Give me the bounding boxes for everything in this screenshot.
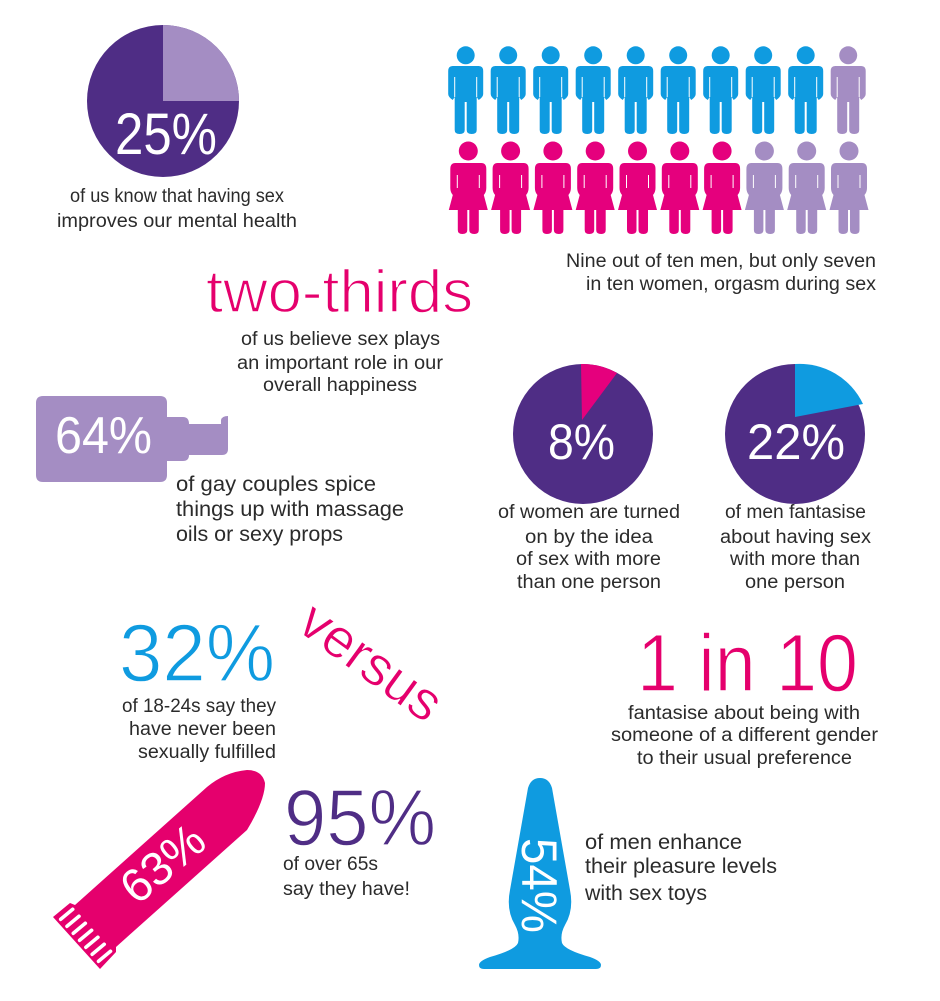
pie chart: 22% [725,364,865,504]
stat: 64%: 64% [55,407,152,465]
caption: orgasm: Nine out of ten men, but only seven [566,251,876,272]
stat: 54%: 54% [511,838,567,933]
caption: women [498,502,680,593]
caption: mental health: of us know that having sex [70,186,284,207]
row of men [448,46,866,134]
icon: vibrator [53,770,265,969]
caption: happiness [237,329,444,396]
heading: 1 in 10: 1 in 10 [637,618,858,709]
pie chart: 25%: 25% [115,102,217,167]
panel: 22% of men [720,364,872,593]
stat: 63%: 63% [109,813,215,914]
caption: happiness: an important role in our [237,353,444,374]
caption: women: of sex with more [516,549,661,570]
panel: men and women pictogram [448,46,877,295]
caption: sex toys [584,831,777,905]
heading: two-thirds: two-thirds [206,258,473,325]
caption: mental health [57,186,297,232]
caption: men [720,502,872,593]
caption: men: of men fantasise [725,502,866,523]
caption: 18-24s: sexually fulfilled [138,742,276,763]
panel: 63% toy [53,770,265,969]
caption: over 65s: say they have! [283,879,410,900]
panel: 32% of 18-24s [119,608,276,763]
pie chart: 25% [87,25,239,177]
caption: 18-24s: of 18-24s say they [122,696,276,717]
caption: different gender: to their usual preference [637,748,852,769]
panel: two-thirds [206,258,473,396]
caption: mental health: improves our mental health [57,211,297,232]
caption: over 65s [283,854,410,900]
row of women [449,142,868,234]
caption: gay couples: things up with massage [176,498,404,521]
pie chart: 8% [513,364,653,504]
caption: women: of women are turned [498,502,680,523]
caption: happiness: of us believe sex plays [241,329,440,350]
caption: over 65s: of over 65s [283,854,378,875]
caption: gay couples: oils or sexy props [176,523,343,546]
panel: 64% massage oil [36,396,404,546]
caption: different gender: someone of a different gender [611,725,879,746]
pie chart: 8%: 8% [548,414,615,470]
caption: gay couples: of gay couples spice [176,473,376,496]
caption: men: one person [745,572,845,593]
stat: 95%: 95% [284,773,436,862]
caption: happiness: overall happiness [263,375,417,396]
caption: women: on by the idea [525,527,653,548]
pie chart: 22%: 22% [747,414,845,470]
caption: sex toys: of men enhance [585,831,742,854]
heading: versus: versus [288,589,455,734]
panel: 25% mental health [57,25,297,232]
caption: different gender [611,703,879,769]
caption: sex toys: with sex toys [584,882,707,905]
icon: oil bottle [36,396,228,482]
panel: 54% toys [479,778,777,969]
caption: 18-24s: have never been [129,719,276,740]
caption: women: than one person [517,572,661,593]
caption: sex toys: their pleasure levels [585,855,777,878]
caption: different gender: fantasise about being with [628,703,860,724]
panel: 8% of women [498,364,680,593]
caption: gay couples [176,473,404,546]
stat: 32%: 32% [119,608,275,699]
icon: plug [479,778,601,969]
caption: orgasm [566,251,877,295]
panel: 95% of over 65s [283,773,436,900]
caption: 18-24s [122,696,276,763]
caption: men: about having sex [720,527,872,548]
caption: orgasm: in ten women, orgasm during sex [586,274,877,295]
panel: 1 in 10 [611,618,879,769]
caption: men: with more than [729,549,860,570]
